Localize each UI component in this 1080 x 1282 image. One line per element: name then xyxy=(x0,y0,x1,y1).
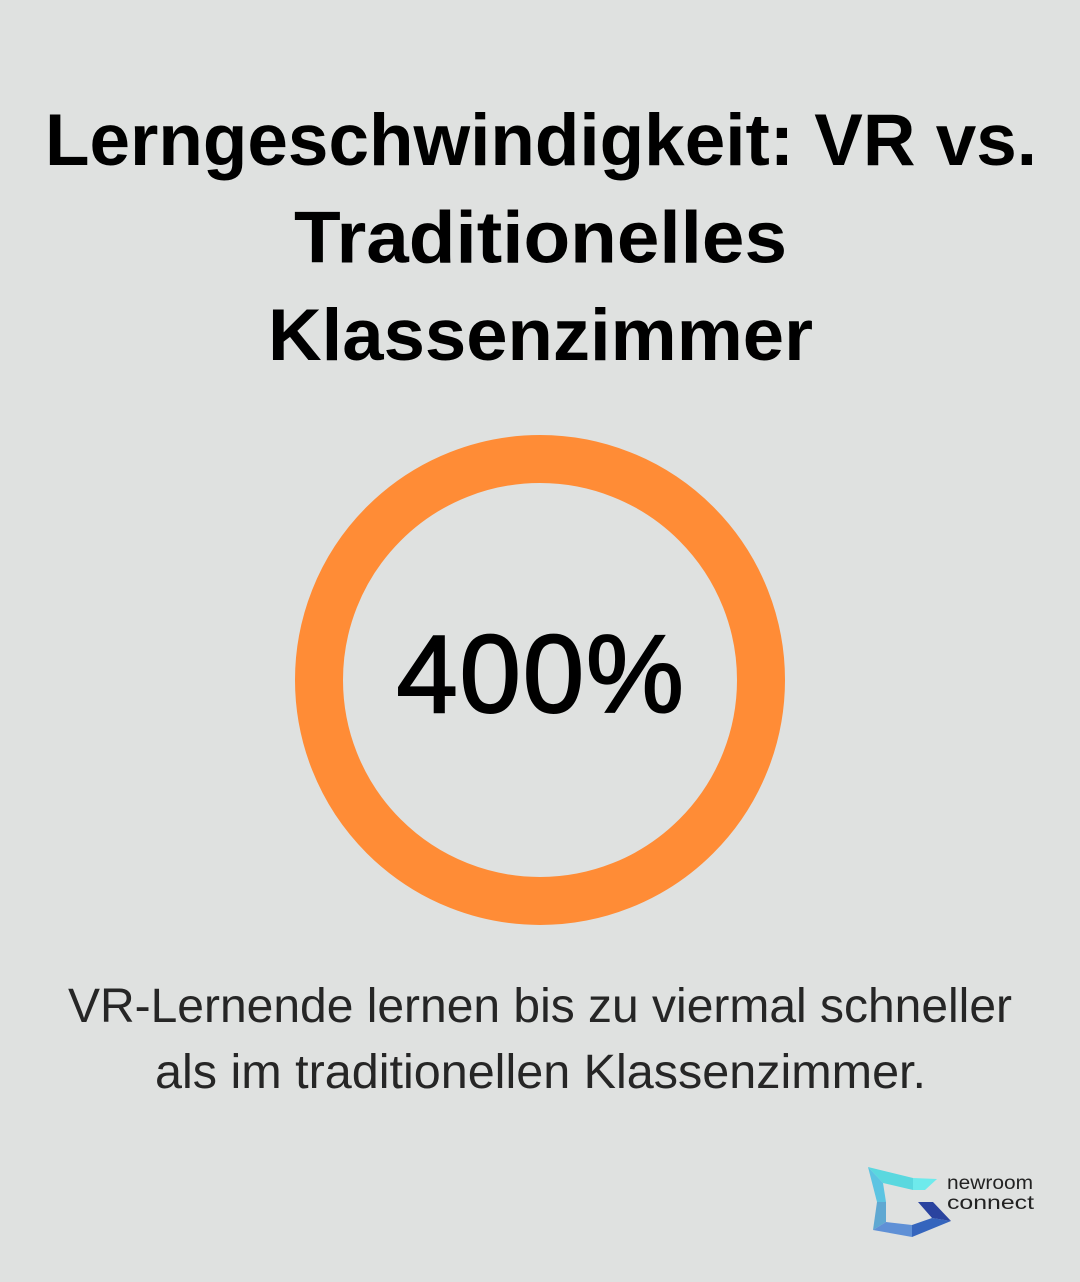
logo: newroom connect: connect xyxy=(947,1192,1035,1214)
logo: newroom connect: newroom xyxy=(947,1172,1033,1194)
description text: VR-Lernende lernen bis zu viermal schneller xyxy=(68,980,1012,1033)
title: Traditionelles xyxy=(294,198,787,278)
ring chart xyxy=(319,459,761,901)
description text: als im traditionellen Klassenzimmer. xyxy=(155,1046,926,1099)
title xyxy=(45,100,1037,376)
big number: 400% xyxy=(396,613,686,736)
title: Lerngeschwindigkeit: VR vs. xyxy=(45,100,1037,181)
description text xyxy=(68,980,1012,1099)
logo: newroom connect xyxy=(868,1167,1035,1237)
title: Klassenzimmer xyxy=(268,295,813,376)
